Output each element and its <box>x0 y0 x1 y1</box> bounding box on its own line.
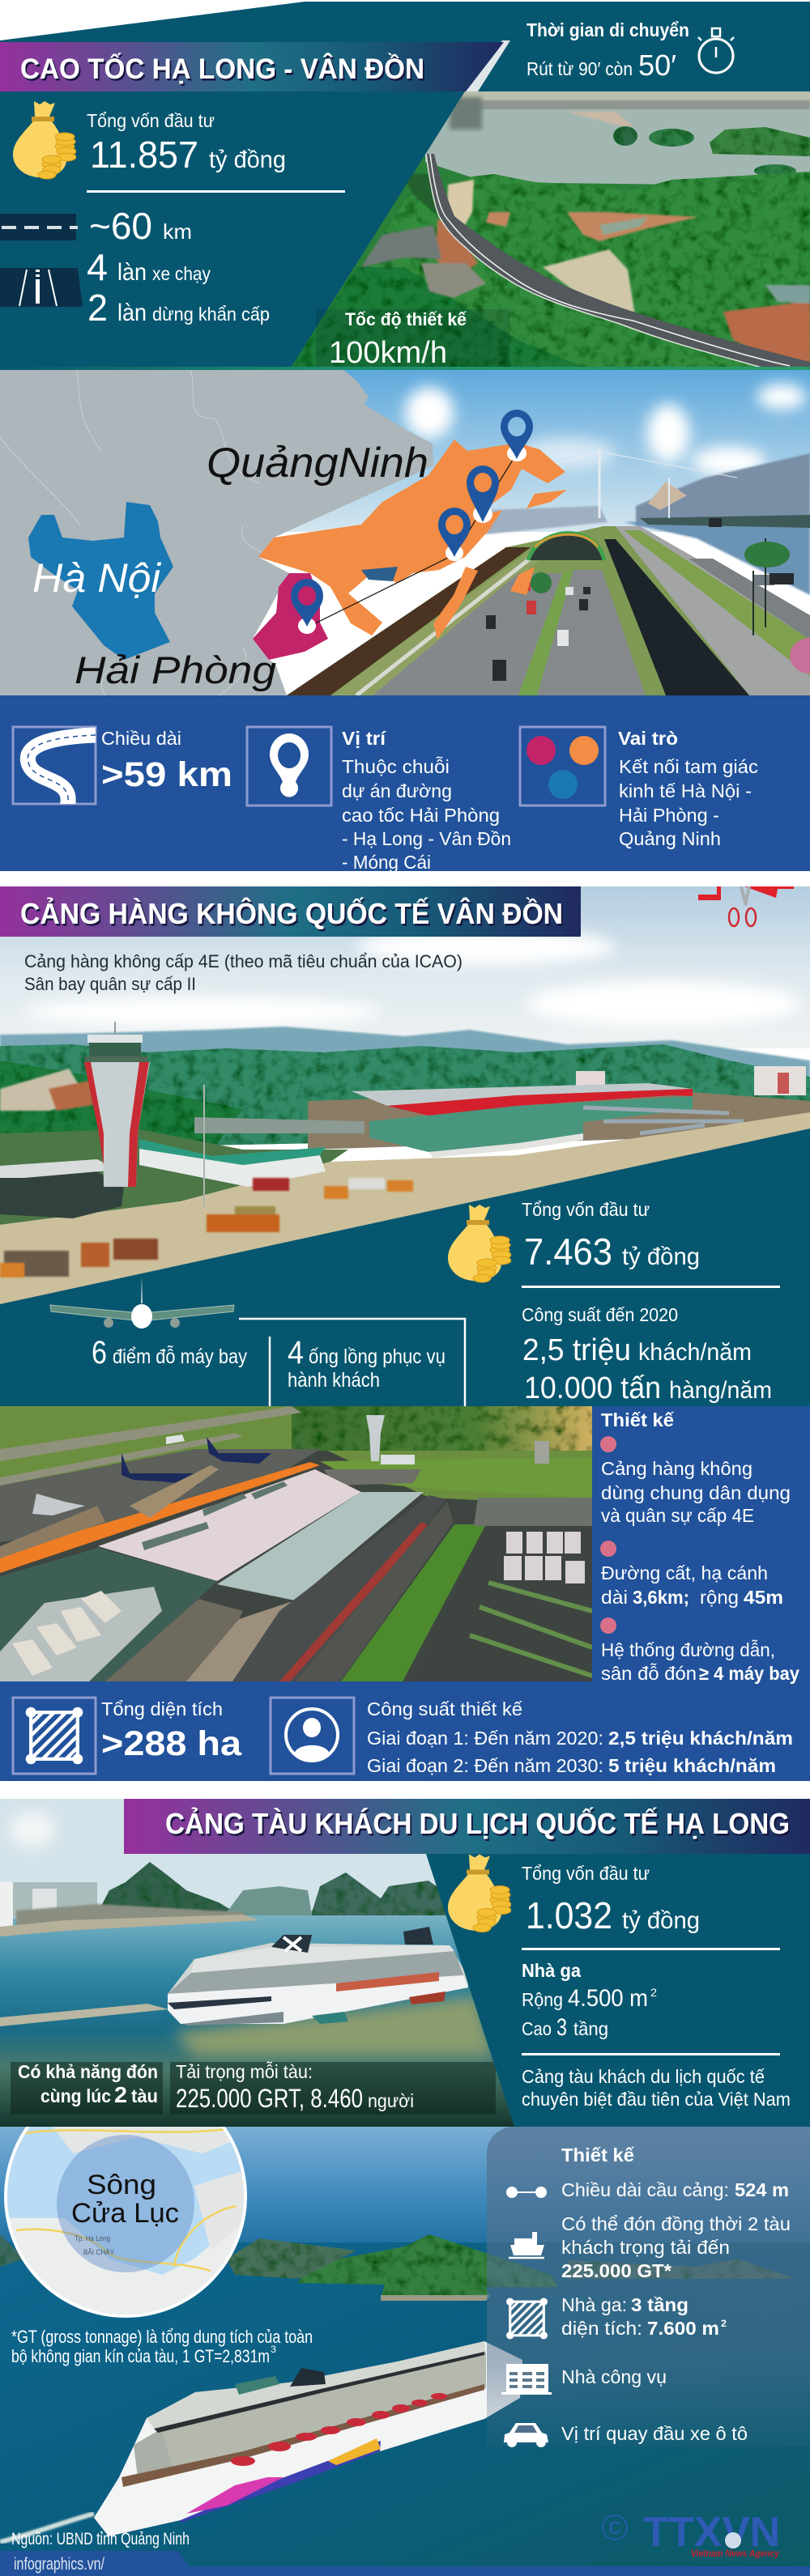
design list: Thiết kế <box>601 1409 674 1430</box>
ship capacity callout: 225.000 GRT, 8.460 <box>176 2084 363 2113</box>
road <box>426 154 810 368</box>
panel: expressway key facts <box>0 695 810 873</box>
design list <box>501 2145 791 2447</box>
map: Hà Nội blue <box>28 502 173 660</box>
TTXVN logo: C <box>609 2518 620 2538</box>
icon: person in circle <box>271 1698 354 1774</box>
heading band <box>0 886 581 937</box>
ship <box>168 1943 468 2024</box>
terminal facts: 4.500 m <box>568 1985 648 2012</box>
panel: Hạ Long cruise port hero <box>0 1799 810 2129</box>
passenger bridges <box>288 1335 446 1392</box>
map: Quảng Ninh orange <box>258 440 565 635</box>
ship capacity callout: Có khả năng đón <box>18 2061 158 2082</box>
icon: road lanes <box>0 268 83 307</box>
control tower <box>84 1022 150 1187</box>
terminal facts: Cảng tàu khách du lịch quốc tế <box>522 2066 765 2087</box>
travel time text: Thời gian di chuyển <box>526 19 689 40</box>
port investment: Tổng vốn đầu tư <box>522 1863 650 1884</box>
heading band <box>124 1799 810 1854</box>
TTXVN logo: TTXVN <box>643 2509 780 2556</box>
icon: road with dashes <box>0 214 78 240</box>
footnote on gross tonnage: bộ không gian kín của tàu, 1 GT=2,831m <box>11 2346 270 2366</box>
photo: road and bridge rendering <box>287 370 810 695</box>
role text <box>618 728 758 849</box>
length text: Chiều dài <box>101 728 181 749</box>
length: ~60 <box>89 205 152 247</box>
design capacity <box>367 1698 793 1776</box>
airport capacity to 2020: hàng/năm <box>669 1377 772 1404</box>
design list: Cảng hàng không <box>601 1458 752 1479</box>
tower <box>366 1415 385 1461</box>
terminal facts: chuyên biệt đầu tiên của Việt Nam <box>522 2089 791 2110</box>
location text: cao tốc Hải Phòng <box>342 805 500 826</box>
design speed: 100km/h <box>329 336 447 370</box>
airport capacity to 2020: 2,5 triệu <box>522 1333 631 1367</box>
design capacity: Công suất thiết kế <box>367 1698 522 1719</box>
footnote on gross tonnage: *GT (gross tonnage) là tổng dung tích của toàn <box>11 2327 313 2347</box>
design capacity: Giai đoạn 2: Đến năm 2030: <box>367 1755 603 1776</box>
slanted white divider <box>465 40 510 91</box>
palms and lamps <box>531 538 810 674</box>
ship capacity callout: cùng lúc <box>40 2085 111 2106</box>
ship capacity callout: Tải trọng mỗi tàu: <box>176 2061 313 2082</box>
icon: car <box>504 2423 548 2447</box>
terminal facts: 3 <box>556 2014 567 2041</box>
facts box lines <box>239 1319 465 1406</box>
wake <box>0 2514 94 2542</box>
location text <box>342 728 511 873</box>
location text: Vị trí <box>342 728 387 749</box>
design list: diện tích: <box>561 2318 642 2339</box>
icon: location pin <box>247 727 331 806</box>
airport class text: Sân bay quân sự cấp II <box>24 974 196 994</box>
panel: Cao tốc Hạ Long - Vân Đồn overview <box>0 2 810 370</box>
lanes: 4 <box>87 246 108 288</box>
map: Hải Phòng magenta <box>253 573 328 660</box>
design list: Hệ thống đường dẫn, <box>601 1639 775 1660</box>
white roof <box>98 1469 361 1581</box>
design list: 3,6km; <box>633 1587 689 1608</box>
icon: money bag <box>448 1854 511 1932</box>
total investment: 11.857 <box>90 134 198 176</box>
role text: Quảng Ninh <box>619 828 721 849</box>
parking stands: 6 <box>92 1335 107 1371</box>
panel: airport terminal design <box>0 1406 810 1781</box>
terminal facts: Cao <box>522 2018 552 2039</box>
travel time text: 50′ <box>638 49 676 82</box>
lanes: xe chạy <box>152 263 211 284</box>
map labels <box>32 440 428 691</box>
icon: ship <box>509 2232 544 2258</box>
airport investment: 7.463 <box>524 1231 612 1273</box>
panel: design speed backdrop <box>316 309 510 367</box>
airport investment <box>522 1199 780 1288</box>
length <box>89 205 192 247</box>
map: gray land <box>0 370 433 695</box>
tunnel arches <box>528 533 604 560</box>
total investment: tỷ đồng <box>209 147 286 173</box>
footnote on gross tonnage: 3 <box>271 2344 276 2355</box>
heading band <box>0 42 504 91</box>
TTXVN logo: Vietnam News Agency <box>691 2548 780 2559</box>
footnote on gross tonnage <box>11 2327 313 2366</box>
icon: stopwatch <box>698 28 734 73</box>
design list: 45m <box>744 1587 783 1608</box>
lanes: dừng khẩn cấp <box>152 304 270 325</box>
cars <box>486 518 794 681</box>
map labels: Hà Nội <box>32 555 162 601</box>
design list: Chiều dài cầu cảng: <box>561 2179 729 2200</box>
ship capacity callout: 2 <box>114 2082 127 2107</box>
terminal facts: 2 <box>650 1986 657 1999</box>
total investment <box>87 110 345 193</box>
total area <box>101 1698 242 1763</box>
tarmac <box>0 1112 810 1304</box>
total investment: Tổng vốn đầu tư <box>87 110 215 131</box>
airport class text: Cảng hàng không cấp 4E (theo mã tiêu chuẩn của ICAO) <box>24 951 463 971</box>
design list: Nhà công vụ <box>561 2366 667 2387</box>
icon: ribbon and scissors <box>698 886 794 926</box>
planes <box>32 1435 271 1515</box>
design speed: Tốc độ thiết kế <box>345 309 467 329</box>
airport capacity to 2020 <box>522 1304 772 1405</box>
role text: Kết nối tam giác <box>619 756 758 777</box>
design list: sân đỗ đón <box>601 1663 697 1684</box>
map inset circle <box>4 2072 247 2323</box>
length: km <box>163 219 192 244</box>
passenger bridges: ống lồng phục vụ <box>309 1345 446 1368</box>
design list: 524 m <box>735 2179 789 2200</box>
lanes: làn <box>117 300 147 326</box>
terminal facts: tầng <box>573 2018 608 2039</box>
website: infographics.vn/ <box>14 2555 104 2574</box>
role text: Hải Phòng - <box>619 805 719 826</box>
length text: >59 km <box>101 755 232 794</box>
icon: area square <box>13 1698 96 1774</box>
design list: 7.600 m <box>647 2318 719 2339</box>
design capacity: Giai đoạn 1: Đến năm 2020: <box>367 1728 603 1749</box>
map label: Sông <box>87 2170 156 2200</box>
terminal <box>352 1083 693 1106</box>
role text: kinh tế Hà Nội - <box>619 780 752 801</box>
green strip <box>341 1524 486 1681</box>
ship <box>94 2341 522 2536</box>
icon: three coloured dots <box>520 727 605 806</box>
map label: Cửa Lục <box>71 2198 179 2229</box>
port investment <box>522 1863 780 1950</box>
travel time text <box>526 19 689 82</box>
passenger bridges: hành khách <box>288 1369 380 1392</box>
orange roof band <box>0 1462 320 1573</box>
map label <box>71 2170 179 2229</box>
airport capacity to 2020: Công suất đến 2020 <box>522 1304 678 1325</box>
ship capacity callout <box>18 2061 414 2113</box>
airport capacity to 2020: 10.000 tấn <box>524 1371 661 1405</box>
terminal facts: Nhà ga <box>522 1960 581 1981</box>
role text: Vai trò <box>618 728 678 749</box>
teal info panel <box>426 1854 810 2127</box>
low building <box>139 1149 326 1187</box>
photo: airport with control tower <box>0 886 810 1344</box>
icon: airplane <box>50 1276 234 1328</box>
teal diagonal panel <box>0 1129 810 1406</box>
map labels: QuảngNinh <box>207 440 428 487</box>
panel: Vân Đồn airport hero <box>0 886 810 1406</box>
icon: quay length <box>506 2187 547 2198</box>
icon: money bag <box>448 1205 511 1282</box>
length text <box>101 728 232 794</box>
source: Nguồn: UBND tỉnh Quảng Ninh <box>11 2530 190 2548</box>
interior <box>0 1548 217 1681</box>
photo: expressway aerial view <box>292 91 810 368</box>
design capacity: 5 triệu khách/năm <box>608 1755 776 1776</box>
parking <box>413 1522 592 1681</box>
port investment: 1.032 <box>526 1894 612 1936</box>
design speed <box>329 309 467 370</box>
location text: - Móng Cái <box>342 852 431 873</box>
route line <box>315 460 514 623</box>
design list: Thiết kế <box>561 2145 634 2166</box>
lanes: 2 <box>87 287 108 329</box>
panel: cruise port design <box>0 2072 810 2576</box>
title: CAO TỐC HẠ LONG - VÂN ĐỒN <box>20 53 424 85</box>
location text: dự án đường <box>342 780 452 801</box>
dark text backdrops <box>11 2062 163 2115</box>
photo: cruise ship at sea <box>0 2127 810 2576</box>
lanes: làn <box>117 259 147 286</box>
design list: 225.000 GT* <box>561 2260 671 2281</box>
terminal facts <box>522 1960 791 2110</box>
design list: và quân sự cấp 4E <box>601 1505 754 1526</box>
icon: terminal area <box>506 2298 548 2339</box>
map inset circle: Tp. Hạ Long <box>75 2234 110 2242</box>
design list <box>600 1409 799 1684</box>
map inset circle: BÃI CHÁY <box>83 2248 114 2256</box>
airport capacity to 2020: khách/năm <box>638 1339 752 1366</box>
port investment: tỷ đồng <box>622 1907 700 1934</box>
ground vehicles <box>0 1178 413 1277</box>
road <box>232 1495 446 1681</box>
panel: location map over road rendering <box>0 370 810 695</box>
design list: Vị trí quay đầu xe ô tô <box>561 2423 748 2444</box>
parking stands: điểm đỗ máy bay <box>113 1345 247 1368</box>
airport investment: Tổng vốn đầu tư <box>522 1199 650 1220</box>
design list: khách trọng tải đến <box>561 2237 730 2258</box>
design list: ≥ 4 máy bay <box>699 1663 799 1684</box>
terminal facts: Rộng <box>522 1989 563 2010</box>
foreground garden <box>0 1129 348 1225</box>
lanes <box>87 246 270 329</box>
location text: Thuộc chuỗi <box>342 756 450 777</box>
parking stands <box>92 1335 247 1371</box>
map labels: Hải Phòng <box>75 648 276 691</box>
ship capacity callout: tàu <box>131 2085 158 2106</box>
design list: 3 tầng <box>631 2294 688 2315</box>
map district lines <box>0 370 275 695</box>
bridge pylon <box>551 449 737 518</box>
airport investment: tỷ đồng <box>622 1243 700 1270</box>
icon: office building <box>501 2364 552 2395</box>
design list: rộng <box>700 1587 739 1608</box>
design list: 2 <box>721 2318 727 2329</box>
panel: design overlay <box>487 2127 810 2446</box>
photo: terminal rendering <box>0 1406 592 1681</box>
passenger bridges: 4 <box>288 1335 304 1371</box>
travel time text: Rút từ 90′ còn <box>526 58 633 79</box>
airport class text <box>24 951 463 994</box>
total area: Tổng diện tích <box>101 1698 223 1719</box>
title: CẢNG HÀNG KHÔNG QUỐC TẾ VÂN ĐỒN <box>20 896 563 930</box>
total area: >288 ha <box>101 1724 242 1763</box>
icon: winding road <box>13 727 96 810</box>
icon: map pins <box>291 410 533 634</box>
design list: Nhà ga: <box>561 2294 627 2315</box>
icon: money bag <box>13 101 76 179</box>
ship capacity callout: người <box>368 2090 414 2111</box>
design list: dài <box>601 1587 628 1608</box>
location text: - Hạ Long - Vân Đồn <box>342 828 511 849</box>
design list: Đường cất, hạ cánh <box>601 1562 768 1583</box>
photo: cruise ship in bay <box>0 1799 535 2129</box>
glass canopy <box>217 1492 424 1600</box>
footer tab <box>0 2551 810 2576</box>
design list: Có thể đón đồng thời 2 tàu <box>561 2213 791 2234</box>
design list: dùng chung dân dụng <box>601 1482 791 1503</box>
design capacity: 2,5 triệu khách/năm <box>608 1728 793 1749</box>
